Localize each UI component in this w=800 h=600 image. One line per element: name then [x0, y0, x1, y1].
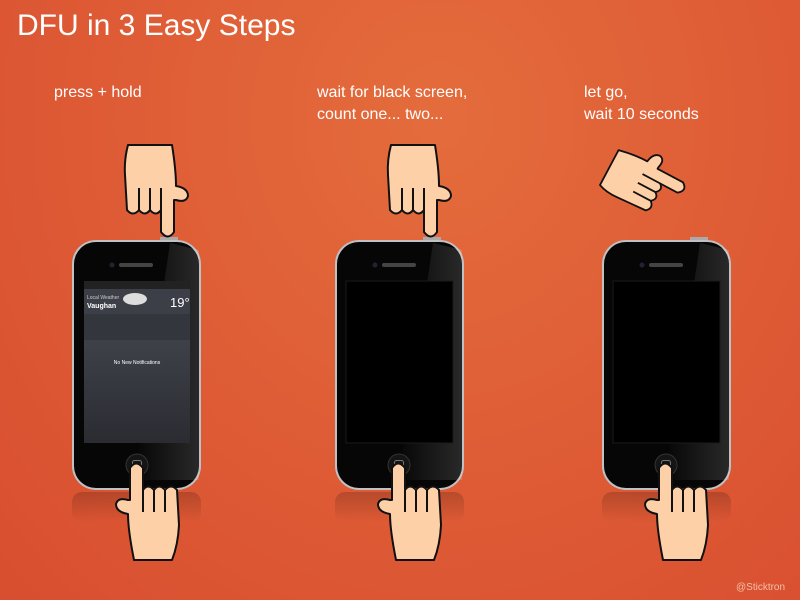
step 1 caption: press + hold [54, 84, 142, 101]
screen: notification center: Vaughan [87, 303, 116, 310]
step 3 caption: let go, [584, 84, 628, 101]
hand: phone 2 top pressing power [388, 145, 451, 236]
phone 3 [602, 237, 731, 522]
screen: notification center: 19° [170, 295, 190, 310]
phone 1 [72, 237, 201, 522]
step 2 caption: wait for black screen, [317, 84, 467, 101]
hand: phone 1 home button [116, 464, 179, 560]
step 3 caption [584, 84, 699, 123]
hand: phone 3 home button [645, 464, 708, 560]
hand: phone 2 home button [378, 464, 441, 560]
hand: phone 3 released [599, 137, 692, 223]
step 2 caption: count one... two... [317, 106, 443, 123]
credit: @Sticktron [736, 582, 785, 593]
step 3 caption: wait 10 seconds [584, 106, 699, 123]
screen: black [346, 281, 453, 443]
step 2 caption [317, 84, 467, 123]
screen: notification center: No New Notifications [114, 360, 161, 366]
phone 2 [335, 237, 464, 522]
hand: phone 1 top pressing power [125, 145, 188, 236]
screen: black [613, 281, 720, 443]
title: DFU in 3 Easy Steps [17, 9, 295, 42]
screen: notification center [84, 281, 190, 443]
screen: notification center: Local Weather [87, 295, 119, 301]
